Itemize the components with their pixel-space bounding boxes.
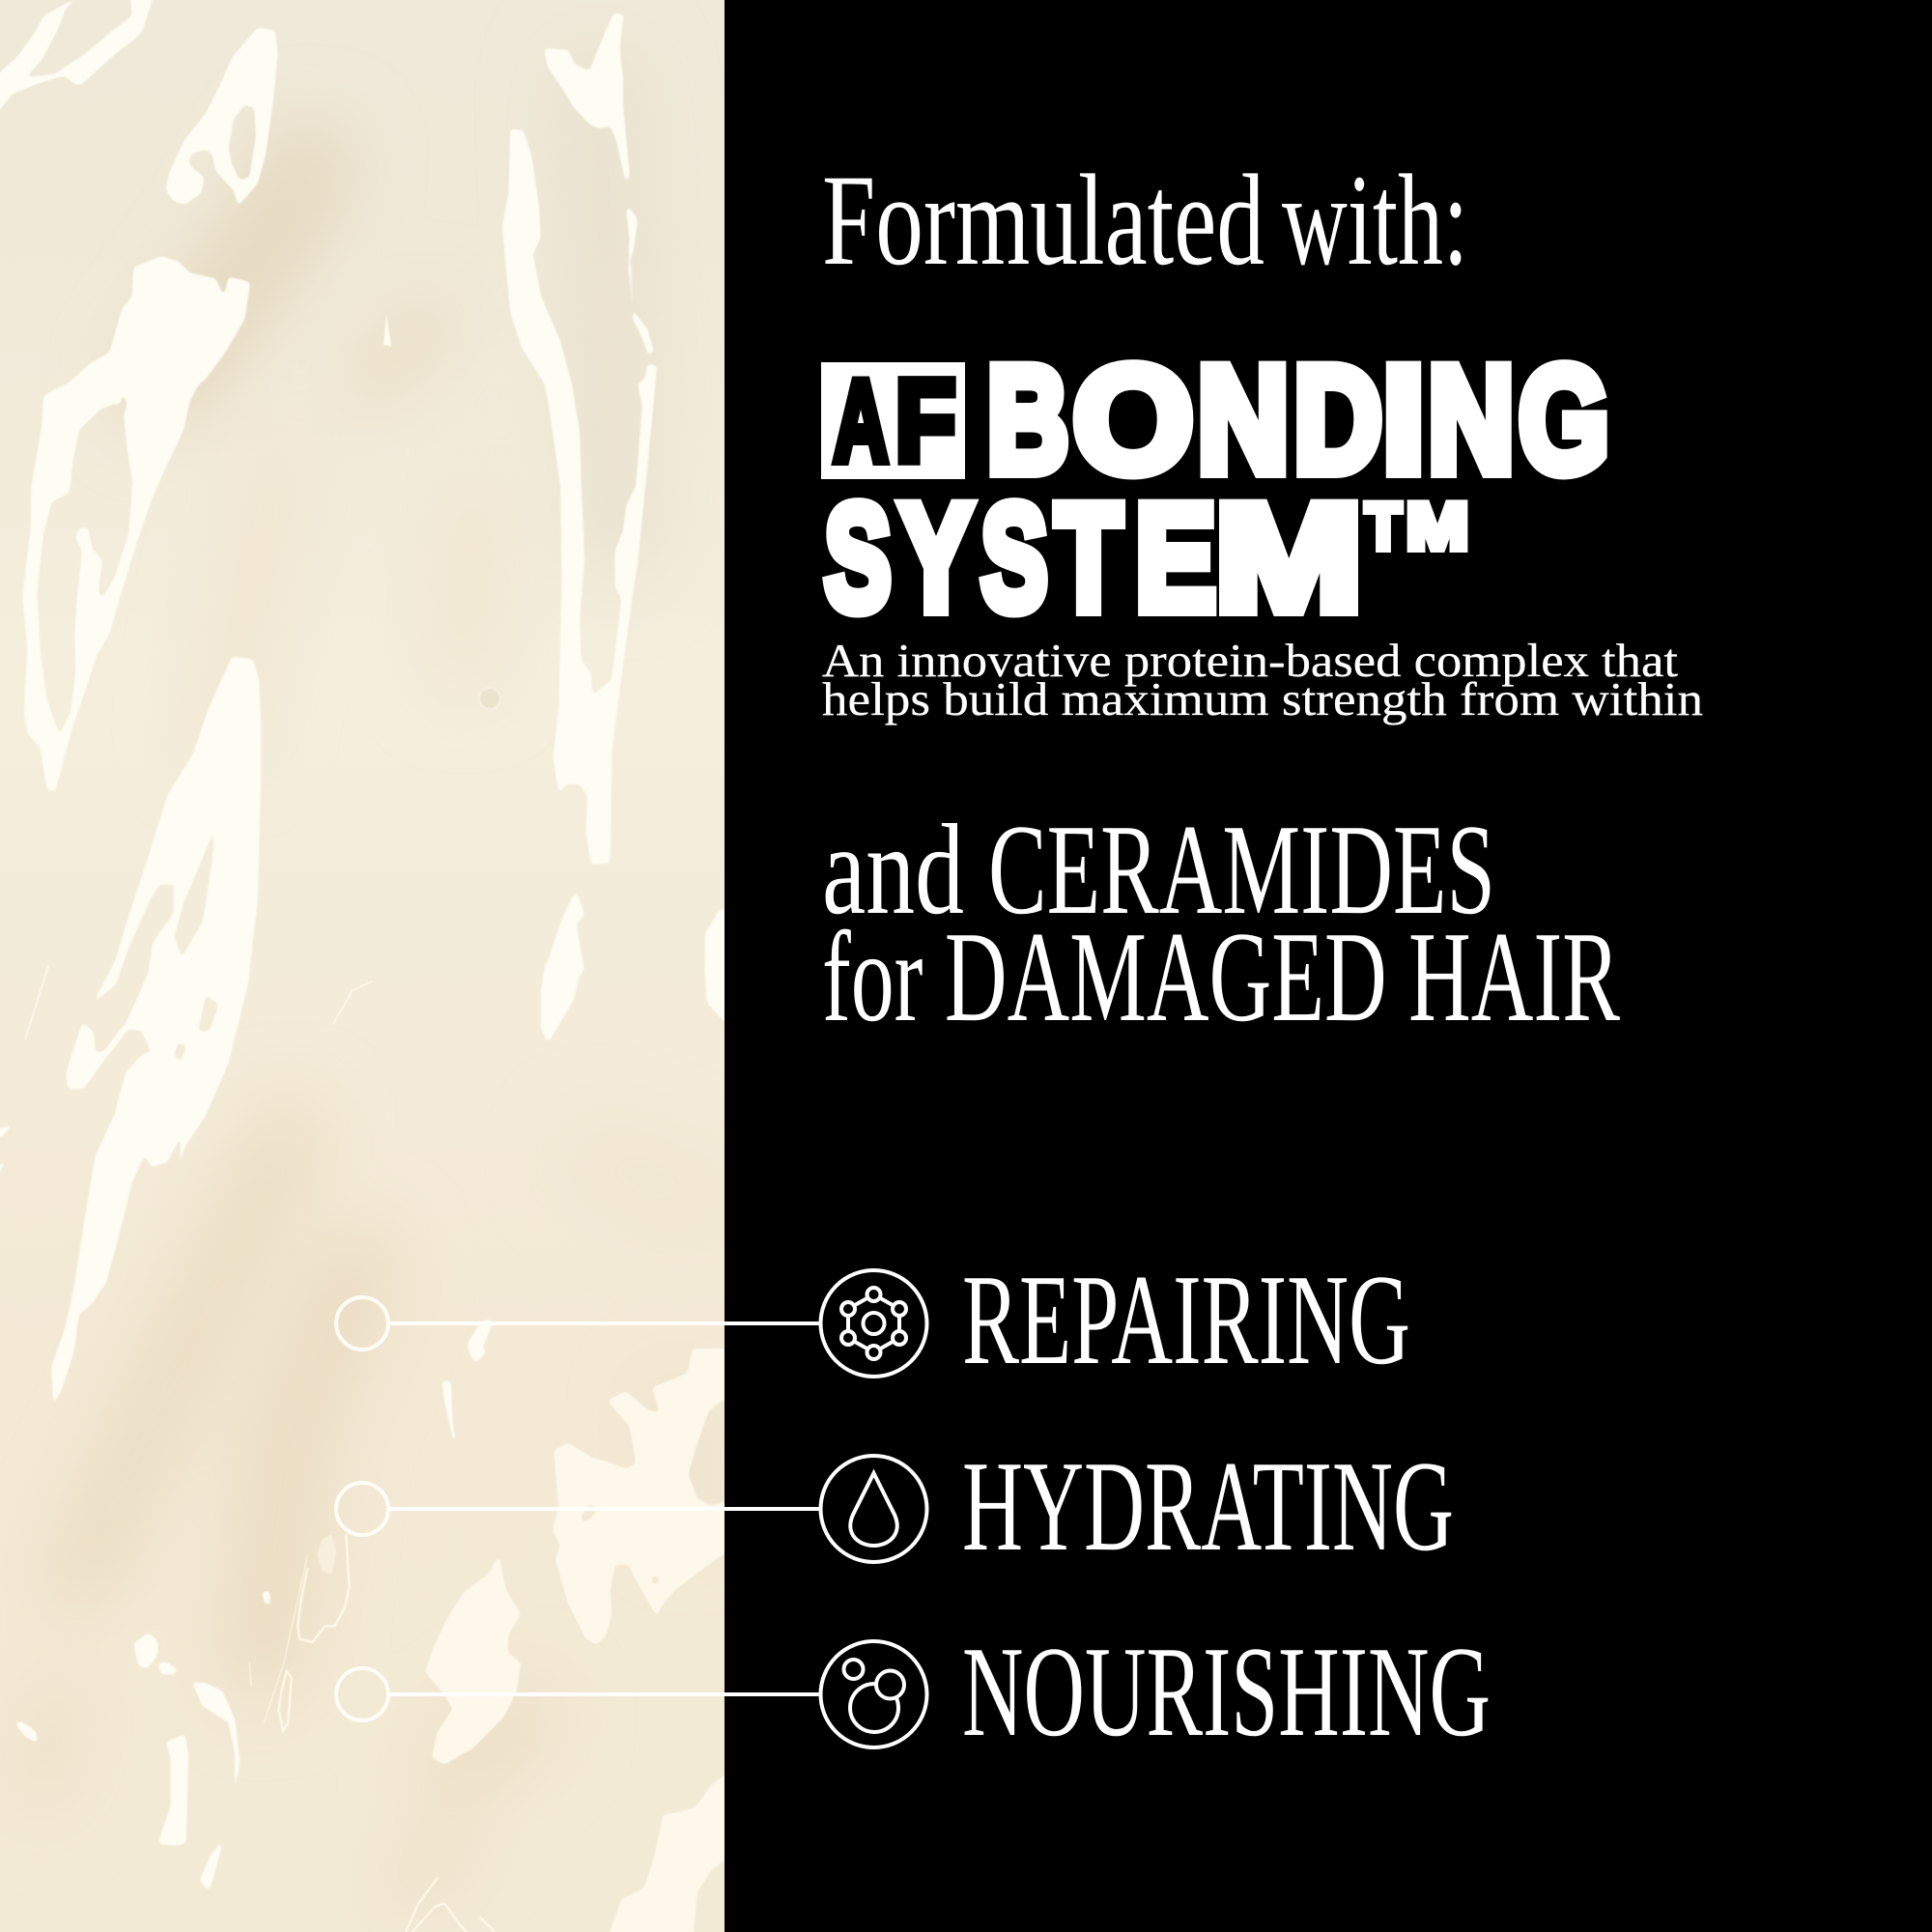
logo word: SYSTEM: T (1056, 474, 1122, 642)
description text: An innovative protein-based complex that (822, 634, 1678, 687)
logo word: SYSTEM: Y (900, 474, 972, 642)
description text (822, 634, 1703, 725)
logo word: BONDING: B (987, 336, 1068, 504)
logo badge: AF (821, 362, 965, 479)
fine scratches and bubbles (25, 314, 500, 1932)
label: nourishing: NOURISHING (962, 1620, 1491, 1763)
benefit row: repairing (336, 1248, 1410, 1391)
logo word: BONDING: G (1519, 336, 1609, 504)
benefit row: nourishing (336, 1620, 1491, 1763)
benefit row: hydrating (336, 1435, 1454, 1577)
description text: helps build maximum strength from within (822, 672, 1703, 725)
panel: cream texture background (0, 0, 724, 1932)
icon: water drop (821, 1456, 927, 1562)
logo word: BONDING: D (1293, 336, 1382, 504)
heading: and ceramides for damaged hair (822, 798, 1620, 1048)
heading: Formulated with: Formulated (822, 149, 1264, 290)
logo word: BONDING: N (1198, 336, 1289, 504)
label: hydrating: HYDRATING (962, 1435, 1454, 1577)
logo word: SYSTEM: M (1215, 474, 1362, 642)
logo word: BONDING (987, 336, 1609, 504)
logo: AF Bonding System wordmark (821, 336, 1609, 642)
logo word: SYSTEM: S (825, 474, 891, 642)
callout connector: repairing (336, 1297, 821, 1350)
heading: and ceramides for damaged hair: and (822, 798, 964, 941)
logo word: BONDING: N (1428, 336, 1515, 504)
callout connector: nourishing (336, 1668, 821, 1720)
logo word: BONDING: O (1073, 336, 1193, 504)
icon: molecule ring (821, 1270, 927, 1377)
logo word: SYSTEM: S (981, 474, 1047, 642)
pale patches, bottom right (425, 1349, 741, 1932)
logo word: SYSTEM: E (1135, 474, 1216, 642)
label: repairing: REPAIRING (962, 1248, 1410, 1391)
cream highlight streaks (0, 0, 750, 1891)
heading: and ceramides for damaged hair: CERAMIDES (988, 798, 1495, 941)
logo word: BONDING: I (1382, 336, 1425, 504)
icon: bubbles (821, 1641, 927, 1747)
logo word: SYSTEM: M (1406, 490, 1468, 563)
logo word: SYSTEM: T (1366, 490, 1401, 563)
logo word: SYSTEM (822, 474, 1468, 642)
heading: Formulated with: with: (1282, 149, 1468, 290)
callout connector: hydrating (336, 1483, 821, 1535)
